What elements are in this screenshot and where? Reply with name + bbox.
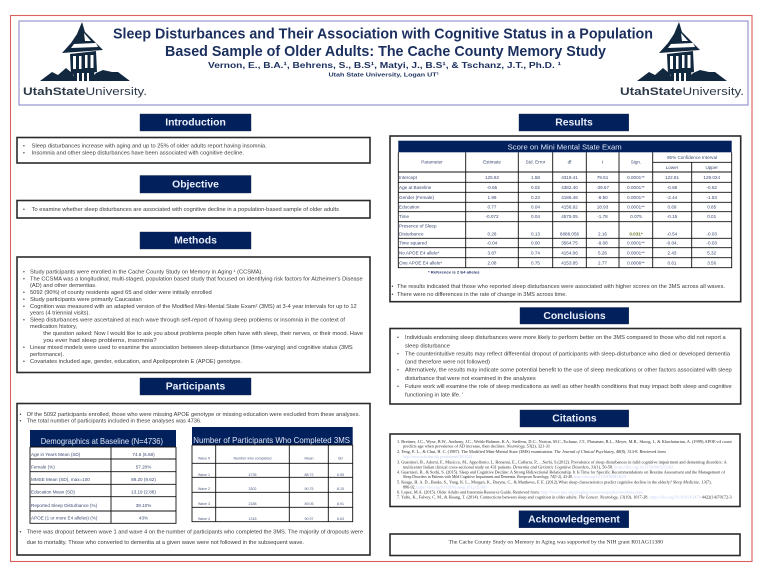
heading: Conclusions (520, 308, 629, 324)
table: score on mini mental state exam: 4319.41 (561, 175, 578, 180)
table: score on mini mental state exam: 0.75 (531, 260, 540, 266)
table: score on mini mental state exam: 0.74 (531, 250, 540, 256)
table: score on mini mental state exam: -0.04, (666, 240, 678, 246)
table: score on mini mental state exam: t (602, 160, 604, 164)
panel: results (390, 136, 741, 302)
table: participants completing 3MS: 90.97 (304, 517, 314, 521)
panel: introduction (17, 138, 370, 163)
heading: Acknowledgement (519, 511, 629, 528)
logo: right Utah State University: UtahState University. (620, 86, 744, 98)
table: demographics at baseline: Age in Years Mean (SD) (31, 452, 81, 457)
heading: Methods: Methods (174, 236, 217, 247)
logo: right Utah State University (620, 22, 744, 98)
table: demographics at baseline: 74.6 (6.68) (132, 452, 155, 457)
heading: Conclusions: Conclusions (543, 311, 606, 322)
panel: acknowledgement: The Cache County Study on Memory in Aging was supported by the NIH grant R01AG11380 (448, 540, 663, 546)
table: score on mini mental state exam: -8.50 (597, 195, 608, 200)
panel: conclusions: • (397, 384, 399, 390)
panel: citations: http://www.ncbi.nlm.nih.gov/pubmed/3611032 (403, 455, 472, 459)
table footnote: * Reference is 2 E4 alleles (428, 270, 480, 274)
panel: conclusions (390, 328, 741, 404)
panel: methods: you ever had sleep problems, insomnia? (43, 338, 157, 344)
heading: Acknowledgement: Acknowledgement (528, 514, 620, 525)
table: score on mini mental state exam: -0.03 (706, 240, 717, 246)
table: score on mini mental state exam: 0.031* (629, 232, 643, 236)
heading: Objective: Objective (172, 180, 219, 190)
panel: methods: Sleep disturbances were ascertained at each wave through self-report of having sleep problems or insomnia in the context of (30, 318, 346, 324)
authors: Vernon, E., B.A.¹, Behrens, S., B.S¹, Matyi, J., B.S¹, & Tschanz, J.T., Ph.D. ¹ (208, 60, 561, 70)
table: score on mini mental state exam: 4153.85 (561, 260, 578, 266)
panel: conclusions: The counterintuitive results may reflect differential dropout of participants with sleep-disturbance who died or developed dementia (405, 351, 730, 357)
table: score on mini mental state exam: 4186.46 (561, 195, 578, 200)
table: score on mini mental state exam: 0.0001** (627, 195, 645, 200)
table: demographics at baseline: APOE (1 or more E4 alleles) (%) (31, 516, 98, 520)
table: score on mini mental state exam: 0.00 (531, 240, 540, 246)
panel: participants: Of the 5092 participants enrolled, those who were missing APOE genotype or missing education were excluded from these analyses. (27, 412, 360, 418)
table: score on mini mental state exam: 5.26 (598, 250, 607, 256)
logo: left Utah State University (23, 22, 147, 98)
heading: Citations: Citations (552, 414, 597, 425)
table: demographics at baseline: 57.20% (136, 464, 151, 470)
table: participants completing 3MS: 8.91 (337, 502, 344, 506)
panel: methods: The CCSMA was a longitudinal, multi-staged, population based study that focused on identifying risk factors for Alzheimer's Disease (30, 276, 363, 282)
table: score on mini mental state exam: -39.67 (596, 185, 609, 190)
table: participants completing 3MS: 89.05 (304, 502, 314, 506)
panel: methods: • (23, 270, 25, 276)
table: demographics at baseline: Education Mean (SD) (31, 490, 75, 494)
table: score on mini mental state exam: 2.43 (668, 250, 677, 256)
table: score on mini mental state exam: 129.024 (703, 175, 720, 180)
table: score on mini mental state exam: 0.01 (707, 214, 717, 219)
panel: citations: 2. Teng, E. L., & Chui, H. C. (1987). The Modified Mini-Mental State (3MS) examination. The Journal of Clinical Psychiatry, 48 (8), 314-8. Retrieved from (397, 450, 666, 455)
panel: methods: the question asked: Now I would like to ask you about problems people often have with sleep, their nerves, or their mood. Have (43, 331, 363, 337)
panel: methods: • (23, 276, 25, 282)
table: score on mini mental state exam: Intercept (399, 175, 418, 180)
panel: participants: due to mortality. Those who converted to dementia at a given wave were not followed in the subsequent wave. (27, 540, 304, 546)
table: score on mini mental state exam: 0.61 (668, 260, 677, 266)
table: demographics at baseline: 13.19 (2.88) (131, 490, 156, 494)
table: demographics at baseline (30, 430, 176, 523)
panel: citations: 886-92. https://doi.org/10.1016/j.sleep.2012.02.003 (403, 485, 487, 489)
panel: participants: The total number of participants included in these analyses was 4736. (27, 418, 202, 424)
table: participants completing 3MS (192, 427, 353, 522)
panel: introduction: • (23, 150, 25, 156)
table: score on mini mental state exam: Lower (666, 165, 679, 170)
panel: participants: There was dropout between wave 1 and wave 4 on the number of participants who completed the 3MS. The majority of dropouts were (27, 530, 363, 536)
table: score on mini mental state exam: 2.08 (488, 260, 497, 266)
heading: Results: Results (555, 118, 593, 129)
table: score on mini mental state exam: Sign. (631, 160, 641, 164)
panel: citations: multicenter Italian clinical cross-sectional study on 431 patients. Dementia and Geriatric Cognitive Disorders, 33 (1), 50-58. https://doi.org/10.1159/000335363 (403, 465, 673, 470)
table: participants completing 3MS: 8.15 (337, 487, 344, 491)
table: score on mini mental state exam: Presence of Sleep (399, 224, 437, 228)
affiliation: Utah State University, Logan UT¹ (328, 72, 439, 78)
table: score on mini mental state exam: Parameter (421, 160, 443, 164)
panel: methods: • (23, 290, 25, 296)
heading: Introduction (140, 114, 251, 131)
panel: methods: 5092 (90%) of county residents aged 65 and older were initially enrolled (30, 290, 212, 296)
title: Sleep Disturbances and Their Association with Cognitive Status in a Population (113, 26, 653, 42)
table: score on mini mental state exam: 0.13 (531, 232, 540, 236)
table: score on mini mental state exam: 3.87 (488, 250, 497, 256)
table: score on mini mental state exam: -0.62 (706, 185, 717, 190)
panel: introduction: • (23, 144, 25, 150)
table: score on mini mental state exam: One APOE E4 allele* (399, 260, 442, 266)
panel: conclusions: Individuals endorsing sleep disturbances were more likely to perform better on the 3MS compared to those who did not report a (405, 335, 726, 341)
panel: methods: Covariates included age, gender, education, and Apolipoprotein E (APOE) genotype. (30, 359, 242, 365)
table: demographics at baseline: 43% (139, 516, 148, 520)
table: participants completing 3MS: 88.72 (304, 473, 314, 477)
table: participants completing 3MS: 2188 (248, 502, 256, 506)
table: participants completing 3MS: Number who completed (234, 456, 271, 460)
table: score on mini mental state exam (398, 141, 732, 268)
panel: methods: medication history, (30, 324, 77, 330)
table: score on mini mental state exam: Upper (705, 165, 718, 170)
table: score on mini mental state exam: 0.0001** (627, 240, 645, 246)
panel: methods: Study participants were primarily Caucasian (30, 297, 142, 303)
heading: Citations (520, 410, 629, 427)
table: score on mini mental state exam: 0.28 (488, 232, 497, 236)
table: demographics at baseline: MMSE Mean (SD), max=100 (31, 477, 90, 482)
table: score on mini mental state exam: -0.54 (667, 232, 678, 236)
table: score on mini mental state exam: -0.65 (487, 185, 498, 190)
table: score on mini mental state exam: 0.0006** (627, 260, 645, 266)
table: score on mini mental state exam: Disturbance (399, 232, 424, 236)
panel: methods (17, 257, 370, 372)
panel: conclusions: Alternatively, the results may indicate some potential benefit to the use of sleep medications or other factors associated with sleep (405, 368, 732, 374)
table: participants completing 3MS: Wave 2 (198, 487, 210, 491)
panel: results: • (392, 292, 394, 298)
heading: Results (519, 114, 629, 131)
panel: objective: • (23, 207, 25, 213)
heading: Methods (140, 232, 251, 249)
header banner (19, 21, 748, 105)
table: score on mini mental state exam: -2.44 (667, 195, 678, 200)
panel: introduction: Insomnia and other sleep disturbances have been associated with cognitive decline. (32, 150, 244, 156)
heading: Participants: Participants (166, 382, 225, 393)
panel: results: There were no differences in the rate of change in 3MS across time. (397, 292, 567, 298)
panel: participants: • (20, 530, 22, 536)
panel: methods: (AD) and other dementias. (30, 283, 97, 289)
panel: methods: • (23, 345, 25, 351)
table: score on mini mental state exam: 6888.056 (560, 232, 580, 236)
table: score on mini mental state exam: 5.32 (707, 250, 717, 256)
heading: Introduction: Introduction (165, 118, 226, 129)
table: score on mini mental state exam: 3564.75 (561, 240, 578, 246)
table: score on mini mental state exam: Std. Error (526, 160, 546, 164)
table: score on mini mental state exam: 0.23 (531, 195, 540, 200)
table: demographics at baseline: Reported Sleep Disturbance (%) (31, 503, 98, 508)
table: participants completing 3MS: 6.63 (337, 517, 344, 521)
table: participants completing 3MS: SD (338, 456, 343, 460)
panel: methods: • (23, 297, 25, 303)
table: score on mini mental state exam: 79.51 (597, 175, 609, 180)
table: participants completing 3MS: Mean (304, 456, 314, 460)
panel: participants: • (20, 412, 22, 418)
table: score on mini mental state exam: 125.92 (485, 175, 499, 180)
table: score on mini mental state exam: Education (399, 204, 420, 210)
logo: left Utah State University: UtahState University. (23, 86, 147, 98)
table: score on mini mental state exam: 0.69 (668, 204, 677, 210)
panel: conclusions: functioning in late life. ' (405, 392, 463, 398)
table: score on mini mental state exam: Gender (Female) (399, 195, 434, 200)
panel: citations: 7. Yaffe, K., Falvey, C. M., & Hoang, T. (2014). Connections between sleep and cognition in older adults. The Lancet. Neurology, 13 (10), 1017-28. https://doi.org/10.1016/S1474 4422(14)70172-3 (397, 496, 732, 501)
table: score on mini mental state exam: -0.04 (487, 240, 498, 246)
heading: Participants (140, 378, 251, 395)
panel: conclusions: (and therefore were not followed) (405, 360, 490, 366)
table: score on mini mental state exam: 0.0001** (627, 185, 645, 190)
table: demographics at baseline: Demographics at Baseline (N=4736) (41, 436, 163, 446)
panel: methods: Study participants were enrolled in the Cache County Study on Memory in Aging ¹ (CCSMA). (30, 270, 263, 276)
panel: citations: 5. Keage, H. A. D., Banks, S., Yang, K. L., Morgan, K., Brayne, C., & Matthews, F. E. (2012).What sleep characteristics predict cognitive decline in the elderly? Sleep Medicine, 13 (7), (397, 480, 712, 485)
panel: conclusions: disturbance that were not examined in the analyses (405, 376, 536, 382)
table: participants completing 3MS: 6.55 (337, 473, 344, 477)
table: score on mini mental state exam: Estimate (483, 160, 501, 164)
panel: introduction: Sleep disturbances increase with aging and up to 25% of older adults report having insomnia. (32, 144, 267, 150)
table: participants completing 3MS: 90.75 (304, 487, 314, 491)
panel: citations: 3. Guarnieri, B., Adorni, F., Musicco, M., Appollonio, I., Bonanni, E., Caffarra, P., ...Sorbi, S.(2012). Prevalence of sleep disturbances in mild cognitive impairment and dementing disorders: A (397, 460, 727, 465)
table: score on mini mental state exam: Time squared (399, 240, 427, 246)
table: participants completing 3MS: Wave # (198, 456, 210, 460)
table: score on mini mental state exam: 0.0001** (627, 204, 645, 210)
table: participants completing 3MS: Wave 3 (198, 502, 210, 506)
panel: participants (17, 404, 370, 555)
heading: Objective (140, 176, 251, 193)
panel: methods: Linear mixed models were used to examine the association between sleep-disturbance (time-varying) and cognitive status (3MS (30, 345, 353, 351)
table: score on mini mental state exam: -1.78 (597, 214, 608, 219)
table: participants completing 3MS: Wave 4 (198, 517, 210, 521)
panel: conclusions: • (397, 335, 399, 341)
table: score on mini mental state exam: 4575.05 (561, 214, 578, 219)
table: score on mini mental state exam: -9.08 (597, 240, 608, 246)
panel: acknowledgement (390, 534, 740, 556)
table: participants completing 3MS: 3302 (248, 487, 256, 491)
table: score on mini mental state exam: -0.072 (485, 214, 499, 219)
table: score on mini mental state exam: -0.68 (667, 185, 678, 190)
table: score on mini mental state exam: 4158.92 (561, 204, 578, 210)
table: score on mini mental state exam: Age at Baseline (399, 185, 432, 190)
table: score on mini mental state exam: Time (399, 214, 409, 219)
panel: results: • (392, 284, 394, 290)
panel: conclusions: Future work will examine the role of sleep medications as well as other health conditions that may impact both sleep and cognitive (405, 384, 732, 390)
table: score on mini mental state exam: 0.85 (707, 204, 717, 210)
table: score on mini mental state exam: df (568, 160, 572, 164)
table: participants completing 3MS: 4736 (248, 473, 256, 477)
title: Based Sample of Older Adults: The Cache County Memory Study (165, 43, 607, 60)
table: score on mini mental state exam: 0.02 (531, 185, 540, 190)
table: participants completing 3MS: Number of Participants Who Completed 3MS (193, 435, 350, 445)
table: score on mini mental state exam: 1.99 (488, 195, 497, 200)
panel: conclusions: sleep disturbance (405, 343, 450, 349)
table: score on mini mental state exam: 0.0001** (627, 175, 645, 180)
table: score on mini mental state exam: 1.58 (531, 175, 540, 180)
table: score on mini mental state exam: 0.04 (531, 214, 540, 219)
panel: methods: Cognition was measured with an adapted version of the Modified Mini-Mental State Exam² (3MS) at 3-4 year intervals for up to 12 (30, 304, 357, 310)
table: demographics at baseline: 39.10% (136, 503, 151, 508)
panel: conclusions: • (397, 351, 399, 357)
table: participants completing 3MS: 1318 (248, 517, 256, 521)
table: score on mini mental state exam: -0.03 (706, 232, 717, 236)
table: score on mini mental state exam: 2.77 (598, 260, 607, 266)
table: score on mini mental state exam: 0.04 (531, 204, 540, 210)
panel: methods: performance). (30, 352, 64, 358)
table: score on mini mental state exam: -1.53 (706, 195, 717, 200)
panel: methods: years (4 triennial visits). (30, 310, 90, 316)
panel: methods: • (23, 304, 25, 310)
table: score on mini mental state exam: 18.93 (597, 204, 609, 210)
panel: citations: Sleep Disorders in Patients with Mild Cognitive Impairment and Dementia. European Neurology, 74(1-2), 43-48. https://doi.org/10.1159/000434629 (403, 475, 626, 480)
table: score on mini mental state exam: No APOE E4 allele* (399, 250, 440, 256)
table: score on mini mental state exam: 0.075 (630, 214, 642, 219)
table: score on mini mental state exam: 0.77 (488, 204, 497, 210)
table: score on mini mental state exam: 122.81 (665, 175, 679, 180)
table: score on mini mental state exam: -0.15 (667, 214, 678, 219)
panel: conclusions: • (397, 368, 399, 374)
panel: citations: 1. Breitner, J.C., Wyse, B.W., Anthony, J.C., Welsh-Bohmer, K.A., Steffens, D.C., Norton, M.C.,Tschanz, J.T., Plassman, B.L., Meyer, M.R., Skoog, I., & Khachaturian, A. (1999).APOE-ε4 count (397, 440, 733, 445)
table: score on mini mental state exam: Score on Mini Mental State Exam (508, 142, 622, 152)
panel: participants: • (20, 418, 22, 424)
panel: citations (390, 434, 740, 506)
table: demographics at baseline: Female (%) (31, 464, 55, 470)
table: score on mini mental state exam: 95% Confidence Interval (667, 155, 717, 160)
table: score on mini mental state exam: 4154.06 (561, 250, 578, 256)
table: demographics at baseline: 89.20 (9.62) (131, 477, 156, 482)
panel: objective: To examine whether sleep disturbances are associated with cognitive decline in a population-based sample of older adults (32, 207, 339, 213)
table: score on mini mental state exam: 4382.40 (561, 185, 578, 190)
table: score on mini mental state exam: 2.16 (598, 232, 607, 236)
title (113, 26, 653, 60)
panel: citations: 4. Guarnieri, B., & Sorbi, S. (2015). Sleep and Cognitive Decline: A Strong Bidirectional Relationship. It Is Time for Specific Recommendations on Routine Assessment and the Management of (397, 470, 726, 475)
table: score on mini mental state exam: 0.0001** (627, 250, 645, 256)
panel: objective (17, 200, 370, 218)
panel: citations: 6. Lopez, M.A. (2015). Older Adults and Insomnia Resource Guide. Retrieved from: http://www.apa.org/pi/aging/resources/guides/insomnia.aspx (397, 491, 643, 496)
panel: results: The results indicated that those who reported sleep disturbances were associated with higher scores on the 3MS across all waves. (397, 284, 725, 290)
panel: citations: predicts age when prevalence of AD increase, then declines. Neurology, 53 (2), 321-31 (403, 445, 550, 450)
table: score on mini mental state exam: 3.56 (707, 260, 717, 266)
panel: methods: • (23, 318, 25, 324)
table: participants completing 3MS: Wave 1 (198, 473, 210, 477)
panel: methods: • (23, 359, 25, 365)
